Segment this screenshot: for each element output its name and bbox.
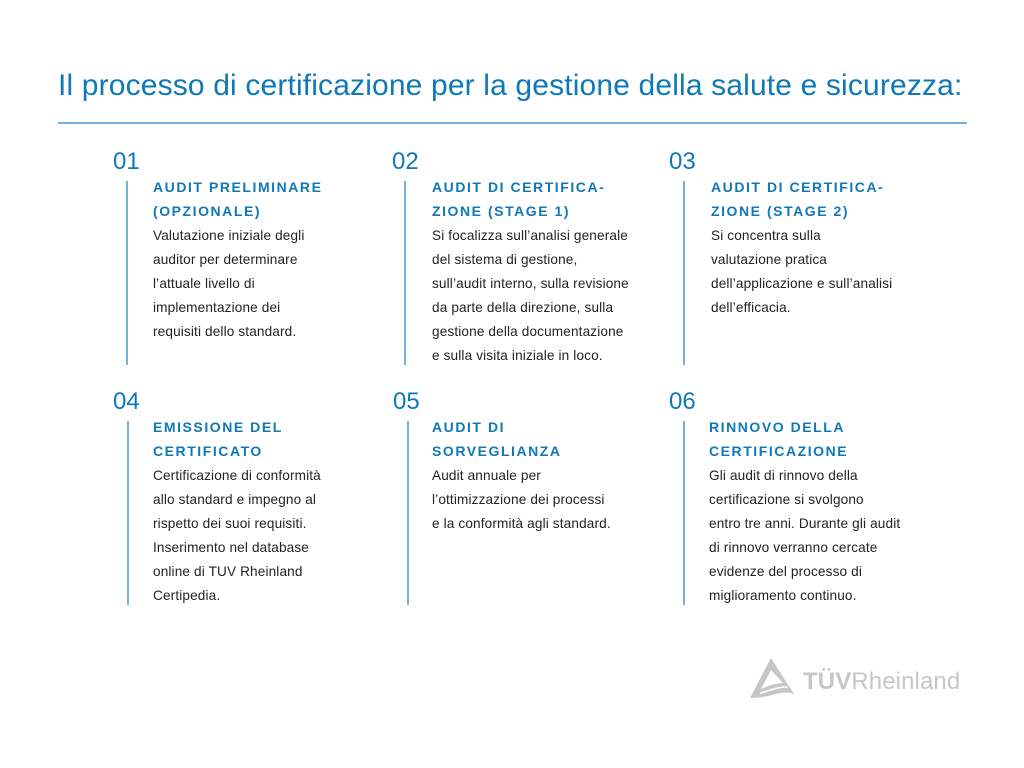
step 06: RINNOVO DELLA xyxy=(709,419,845,435)
step 06: miglioramento continuo. xyxy=(709,588,857,602)
step 01 xyxy=(113,148,322,365)
step 03: dell’applicazione e sull’analisi xyxy=(711,276,892,290)
step 02 xyxy=(392,148,629,365)
step 01: implementazione dei xyxy=(153,300,280,314)
step 03 xyxy=(669,148,892,365)
step 01: 01 xyxy=(113,148,140,175)
step 04: Certipedia. xyxy=(153,588,220,602)
step 03: AUDIT DI CERTIFICA- xyxy=(711,179,884,195)
step 02: ZIONE (STAGE 1) xyxy=(432,203,570,219)
icon: triangle mark xyxy=(750,658,794,698)
step 05: Audit annuale per xyxy=(432,468,541,482)
step 04: rispetto dei suoi requisiti. xyxy=(153,516,307,530)
step 03: valutazione pratica xyxy=(711,252,827,266)
step 01: auditor per determinare xyxy=(153,252,298,266)
step 01: (OPZIONALE) xyxy=(153,203,261,219)
title: Il processo di certificazione per la gestione della salute e sicurezza: xyxy=(58,69,962,102)
step 02: e sulla visita iniziale in loco. xyxy=(432,348,603,362)
step 02: sull’audit interno, sulla revisione xyxy=(432,276,629,290)
step 01: requisiti dello standard. xyxy=(153,324,296,338)
step 02: da parte della direzione, sulla xyxy=(432,300,613,314)
step 04 xyxy=(113,388,321,605)
step 02: AUDIT DI CERTIFICA- xyxy=(432,179,605,195)
step 04: Certificazione di conformità xyxy=(153,468,321,482)
step 02: del sistema di gestione, xyxy=(432,252,577,266)
step 02: 02 xyxy=(392,148,419,175)
step 01: AUDIT PRELIMINARE xyxy=(153,179,322,195)
step 02: gestione della documentazione xyxy=(432,324,624,338)
step 04: allo standard e impegno al xyxy=(153,492,316,506)
step 03: 03 xyxy=(669,148,696,175)
step 01: l’attuale livello di xyxy=(153,276,255,290)
step 04: online di TUV Rheinland xyxy=(153,564,303,578)
step 04: Inserimento nel database xyxy=(153,540,309,554)
step 03: dell’efficacia. xyxy=(711,300,791,314)
logo text: TÜVRheinland xyxy=(803,668,960,695)
step 05: e la conformità agli standard. xyxy=(432,516,611,530)
step 06: CERTIFICAZIONE xyxy=(709,443,848,459)
step 06: Gli audit di rinnovo della xyxy=(709,468,858,482)
step 06: certificazione si svolgono xyxy=(709,492,864,506)
step 05: l’ottimizzazione dei processi xyxy=(432,492,605,506)
step 01: Valutazione iniziale degli xyxy=(153,228,305,242)
step 05 xyxy=(393,388,611,605)
step 03: Si concentra sulla xyxy=(711,228,821,242)
step 04: EMISSIONE DEL xyxy=(153,419,283,435)
step 06: evidenze del processo di xyxy=(709,564,862,578)
step 06: 06 xyxy=(669,388,696,415)
step 06: entro tre anni. Durante gli audit xyxy=(709,516,900,530)
logo: TÜV Rheinland xyxy=(750,658,960,698)
step 04: CERTIFICATO xyxy=(153,443,263,459)
step 06: di rinnovo verranno cercate xyxy=(709,540,878,554)
step 04: 04 xyxy=(113,388,140,415)
step 03: ZIONE (STAGE 2) xyxy=(711,203,849,219)
step 06 xyxy=(669,388,900,605)
step 05: AUDIT DI xyxy=(432,419,505,435)
step 02: Si focalizza sull’analisi generale xyxy=(432,228,628,242)
step 05: 05 xyxy=(393,388,420,415)
step 05: SORVEGLIANZA xyxy=(432,443,562,459)
